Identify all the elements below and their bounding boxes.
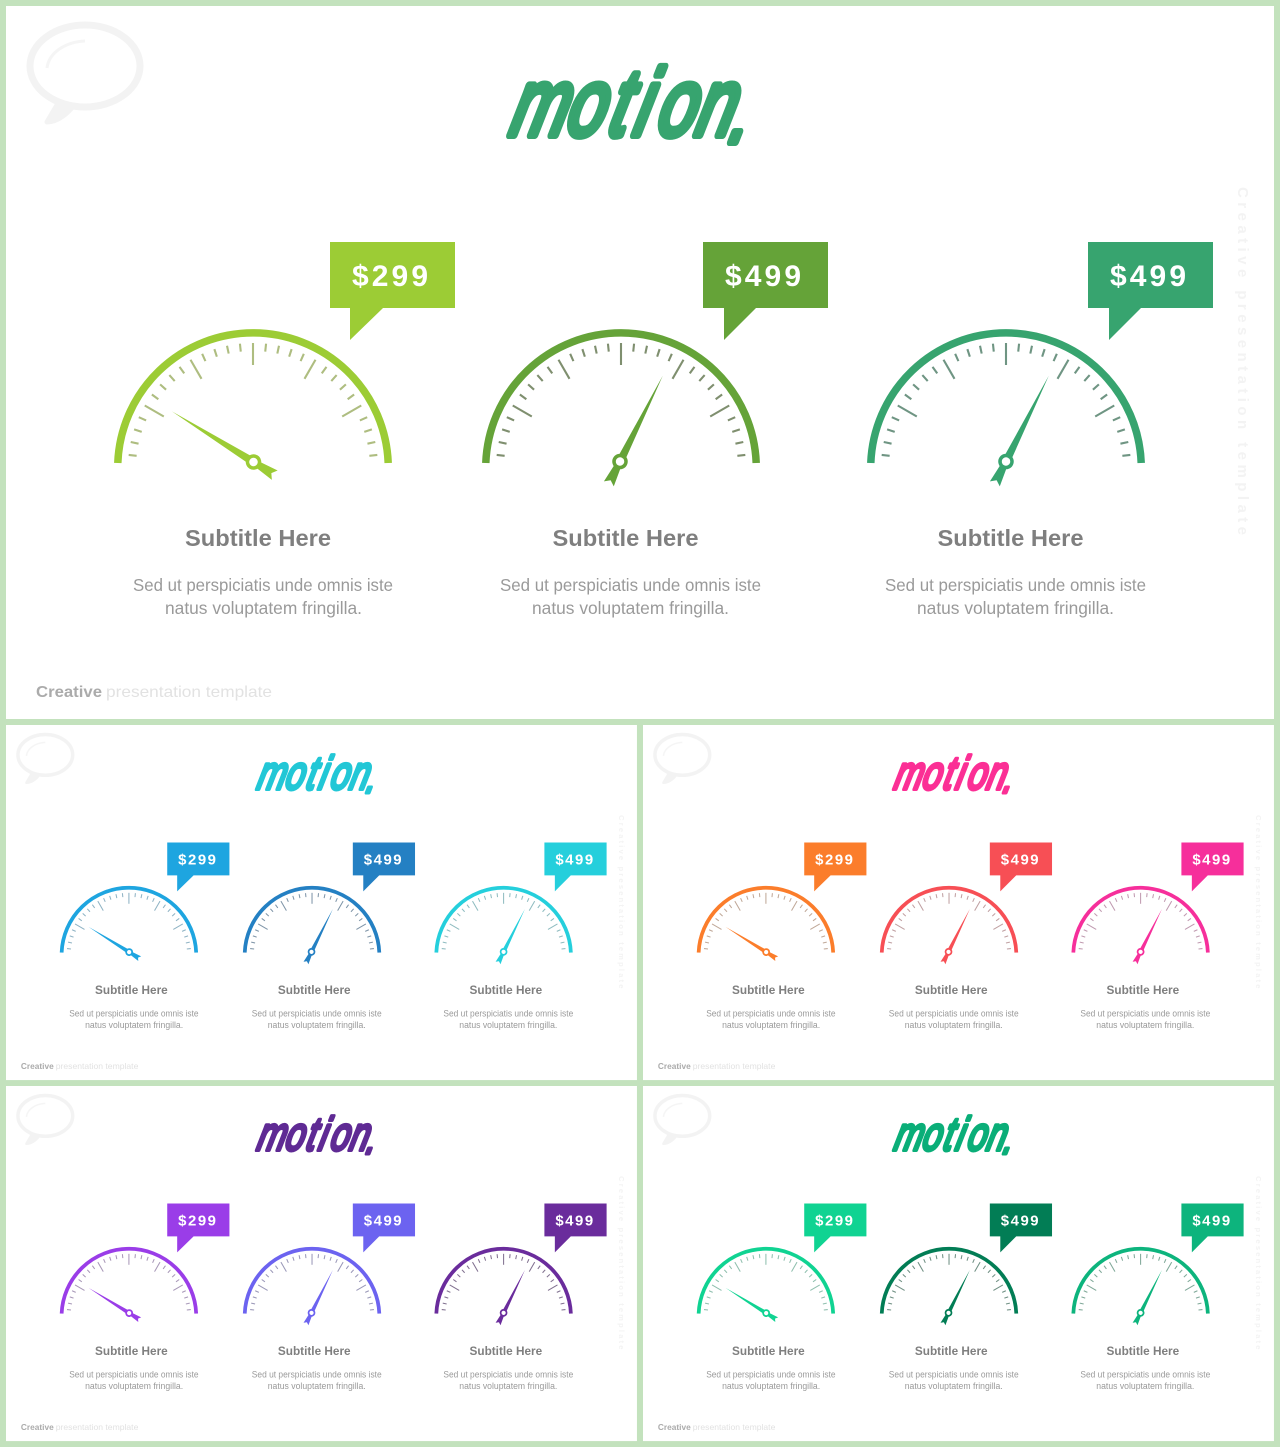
- needle: [303, 1269, 336, 1325]
- body text 3: [443, 1369, 573, 1391]
- footer label: [658, 1062, 776, 1071]
- title: motion.: [252, 746, 386, 803]
- body text 3: natus voluptatem fringilla.: [459, 1381, 557, 1391]
- needle: [495, 908, 528, 964]
- panel: large green slide: [6, 6, 1274, 719]
- body text 2: Sed ut perspiciatis unde omnis iste: [252, 1369, 382, 1379]
- body text 2: natus voluptatem fringilla.: [268, 1381, 366, 1391]
- body text 3: Sed ut perspiciatis unde omnis iste: [1080, 1369, 1210, 1379]
- price callout $299: [804, 843, 866, 891]
- body text 2: [889, 1369, 1019, 1391]
- footer label: Creative: [658, 1062, 691, 1071]
- body text 1: natus voluptatem fringilla.: [722, 1020, 820, 1030]
- needle: [1132, 1269, 1165, 1325]
- body text 1: natus voluptatem fringilla.: [85, 1381, 183, 1391]
- panel: blue slide: [6, 725, 637, 1080]
- needle: [87, 924, 141, 961]
- dial: [245, 888, 379, 953]
- gauge 3: [1073, 843, 1244, 964]
- price callout $299: [804, 1204, 866, 1252]
- title: motion.: [889, 746, 1023, 803]
- body text 1: [133, 575, 393, 618]
- body text 1: [69, 1008, 199, 1030]
- needle: [87, 1285, 141, 1322]
- vertical side label: Creative presentation template: [1234, 187, 1251, 535]
- body text 1: Sed ut perspiciatis unde omnis iste: [706, 1008, 836, 1018]
- body text 3: natus voluptatem fringilla.: [1096, 1020, 1194, 1030]
- gauge 3: [436, 843, 607, 964]
- footer label: presentation template: [693, 1062, 776, 1071]
- body text 2: Sed ut perspiciatis unde omnis iste: [500, 575, 761, 595]
- body text 1: Sed ut perspiciatis unde omnis iste: [69, 1369, 199, 1379]
- dial: [882, 1249, 1016, 1314]
- gauge 1: [118, 242, 455, 480]
- footer label: presentation template: [106, 684, 272, 701]
- body text 3: Sed ut perspiciatis unde omnis iste: [1080, 1008, 1210, 1018]
- title: motion.: [501, 50, 769, 162]
- price callout $499: $499: [555, 851, 593, 868]
- subtitle 1: Subtitle Here: [95, 1345, 168, 1358]
- subtitle 3: Subtitle Here: [1107, 1345, 1180, 1358]
- footer label: presentation template: [56, 1423, 139, 1432]
- body text 1: Sed ut perspiciatis unde omnis iste: [133, 575, 393, 595]
- dial: [436, 888, 571, 953]
- body text 3: natus voluptatem fringilla.: [917, 598, 1114, 618]
- price callout $499: [544, 843, 607, 891]
- subtitle 3: Subtitle Here: [470, 984, 543, 997]
- dial: [245, 1249, 379, 1314]
- price callout $499: [353, 843, 415, 891]
- panel: purple slide: [6, 1086, 637, 1441]
- needle: [495, 1269, 528, 1325]
- price callout $499: [990, 1204, 1052, 1252]
- vertical side label: Creative presentation template: [617, 815, 626, 988]
- dial: [699, 888, 833, 953]
- subtitle 2: Subtitle Here: [915, 1345, 988, 1358]
- price callout $499: [353, 1204, 415, 1252]
- panel: emerald slide: [643, 1086, 1274, 1441]
- gauge 1: [62, 843, 229, 961]
- dial: [62, 1249, 196, 1314]
- dial: [486, 333, 756, 463]
- body text 3: natus voluptatem fringilla.: [459, 1020, 557, 1030]
- price callout $299: $299: [352, 260, 428, 293]
- subtitle 3: Subtitle Here: [1107, 984, 1180, 997]
- subtitle 1: Subtitle Here: [732, 1345, 805, 1358]
- gauge 3: [871, 242, 1213, 487]
- body text 3: [443, 1008, 573, 1030]
- icon: speech bubble watermark: [30, 25, 140, 122]
- body text 1: [706, 1369, 836, 1391]
- gauge 2: [486, 242, 828, 487]
- subtitle 1: Subtitle Here: [185, 525, 331, 551]
- price callout $499: $499: [1001, 851, 1039, 868]
- footer label: [658, 1423, 776, 1432]
- price callout $299: [167, 1204, 229, 1252]
- footer label: [21, 1062, 139, 1071]
- body text 2: [252, 1369, 382, 1391]
- price callout $499: [1088, 242, 1213, 340]
- subtitle 2: Subtitle Here: [552, 525, 698, 551]
- title: motion.: [889, 1107, 1023, 1164]
- price callout $299: $299: [815, 851, 853, 868]
- price callout $499: [990, 843, 1052, 891]
- body text 1: Sed ut perspiciatis unde omnis iste: [706, 1369, 836, 1379]
- footer label: Creative: [36, 684, 102, 701]
- body text 3: Sed ut perspiciatis unde omnis iste: [885, 575, 1146, 595]
- icon: speech bubble watermark: [655, 1095, 710, 1144]
- body text 2: [252, 1008, 382, 1030]
- footer label: [36, 684, 272, 701]
- price callout $499: [1181, 843, 1244, 891]
- icon: speech bubble watermark: [18, 734, 73, 783]
- dial: [699, 1249, 833, 1314]
- body text 3: Sed ut perspiciatis unde omnis iste: [443, 1008, 573, 1018]
- price callout $299: [330, 242, 455, 340]
- price callout $299: [167, 843, 229, 891]
- price callout $499: [703, 242, 828, 340]
- gauge 2: [882, 843, 1052, 964]
- gauge 2: [245, 1204, 415, 1325]
- subtitle 1: Subtitle Here: [732, 984, 805, 997]
- body text 2: natus voluptatem fringilla.: [532, 598, 729, 618]
- price callout $499: $499: [725, 260, 801, 293]
- panel: orange and pink slide: [643, 725, 1274, 1080]
- footer label: Creative: [21, 1423, 54, 1432]
- body text 2: natus voluptatem fringilla.: [905, 1020, 1003, 1030]
- subtitle 2: Subtitle Here: [915, 984, 988, 997]
- body text 2: Sed ut perspiciatis unde omnis iste: [889, 1008, 1019, 1018]
- price callout $499: $499: [555, 1212, 593, 1229]
- dial: [1073, 888, 1208, 953]
- body text 2: natus voluptatem fringilla.: [905, 1381, 1003, 1391]
- dial: [62, 888, 196, 953]
- needle: [169, 406, 278, 480]
- gauge 1: [699, 1204, 866, 1322]
- dial: [1073, 1249, 1208, 1314]
- body text 2: [889, 1008, 1019, 1030]
- price callout $499: [544, 1204, 607, 1252]
- body text 1: natus voluptatem fringilla.: [85, 1020, 183, 1030]
- body text 1: Sed ut perspiciatis unde omnis iste: [69, 1008, 199, 1018]
- icon: speech bubble watermark: [655, 734, 710, 783]
- body text 3: [1080, 1008, 1210, 1030]
- dial: [882, 888, 1016, 953]
- subtitle 2: Subtitle Here: [278, 1345, 351, 1358]
- footer label: [21, 1423, 139, 1432]
- body text 1: [706, 1008, 836, 1030]
- vertical side label: Creative presentation template: [1254, 815, 1263, 988]
- body text 2: [500, 575, 761, 618]
- price callout $299: $299: [178, 1212, 216, 1229]
- subtitle 3: Subtitle Here: [938, 525, 1084, 551]
- price callout $499: $499: [364, 851, 402, 868]
- footer label: presentation template: [693, 1423, 776, 1432]
- body text 2: Sed ut perspiciatis unde omnis iste: [889, 1369, 1019, 1379]
- gauge 3: [1073, 1204, 1244, 1325]
- needle: [940, 908, 973, 964]
- body text 2: Sed ut perspiciatis unde omnis iste: [252, 1008, 382, 1018]
- body text 1: [69, 1369, 199, 1391]
- footer label: presentation template: [56, 1062, 139, 1071]
- body text 3: natus voluptatem fringilla.: [1096, 1381, 1194, 1391]
- needle: [724, 1285, 778, 1322]
- subtitle 3: Subtitle Here: [470, 1345, 543, 1358]
- dial: [118, 333, 388, 463]
- needle: [1132, 908, 1165, 964]
- needle: [603, 373, 668, 487]
- gauge 3: [436, 1204, 607, 1325]
- price callout $499: $499: [364, 1212, 402, 1229]
- body text 2: natus voluptatem fringilla.: [268, 1020, 366, 1030]
- gauge 1: [62, 1204, 229, 1322]
- price callout $299: $299: [815, 1212, 853, 1229]
- needle: [724, 924, 778, 961]
- footer label: Creative: [658, 1423, 691, 1432]
- footer label: Creative: [21, 1062, 54, 1071]
- gauge 1: [699, 843, 866, 961]
- gauge 2: [882, 1204, 1052, 1325]
- price callout $499: $499: [1110, 260, 1186, 293]
- price callout $499: $499: [1192, 851, 1230, 868]
- subtitle 1: Subtitle Here: [95, 984, 168, 997]
- price callout $499: $499: [1192, 1212, 1230, 1229]
- body text 3: [1080, 1369, 1210, 1391]
- price callout $299: $299: [178, 851, 216, 868]
- dial: [871, 333, 1141, 463]
- needle: [303, 908, 336, 964]
- price callout $499: $499: [1001, 1212, 1039, 1229]
- vertical side label: Creative presentation template: [617, 1176, 626, 1349]
- body text 1: natus voluptatem fringilla.: [722, 1381, 820, 1391]
- gauge 2: [245, 843, 415, 964]
- body text 3: [885, 575, 1146, 618]
- icon: speech bubble watermark: [18, 1095, 73, 1144]
- needle: [940, 1269, 973, 1325]
- needle: [989, 373, 1054, 487]
- subtitle 2: Subtitle Here: [278, 984, 351, 997]
- title: motion.: [252, 1107, 386, 1164]
- price callout $499: [1181, 1204, 1244, 1252]
- body text 1: natus voluptatem fringilla.: [165, 598, 362, 618]
- body text 3: Sed ut perspiciatis unde omnis iste: [443, 1369, 573, 1379]
- dial: [436, 1249, 571, 1314]
- vertical side label: Creative presentation template: [1254, 1176, 1263, 1349]
